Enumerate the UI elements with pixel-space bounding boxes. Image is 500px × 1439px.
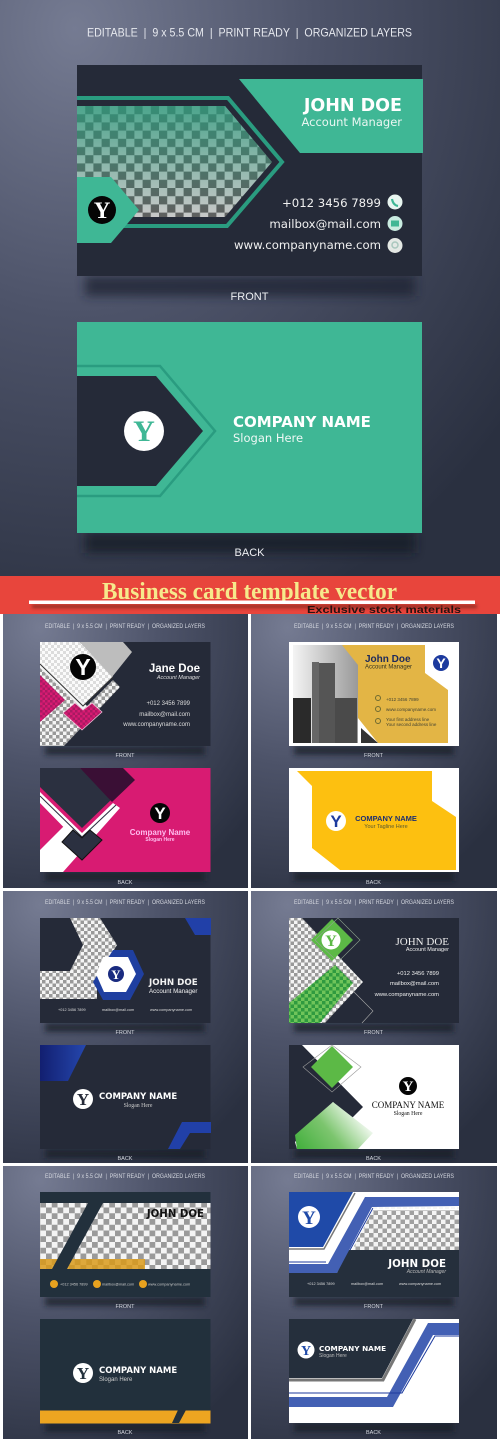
- icon: Y logo: [150, 803, 170, 823]
- name and contact: www.companyname.com: [150, 1008, 192, 1012]
- panel: green card set: BACK: [366, 1156, 381, 1162]
- company: COMPANY NAME: [355, 814, 417, 823]
- icon: Y logo: Y: [436, 655, 446, 671]
- company: [372, 1100, 445, 1117]
- panel: green card set: FRONT: [364, 1030, 384, 1036]
- icons: contact: [388, 194, 402, 253]
- panel: green card set: [251, 891, 497, 1163]
- panel: navy hexagon card set: BACK: [118, 1156, 133, 1162]
- name and contact: John Doe: [365, 654, 411, 665]
- name block: Account Manager: [302, 115, 402, 129]
- panel: orange card set: FRONT: [116, 1304, 135, 1310]
- name block: JOHN DOE: [303, 96, 402, 116]
- name and contact: www.companyname.com: [122, 722, 190, 728]
- contact details: www.companyname.com: [234, 238, 381, 252]
- company: Slogan Here: [145, 837, 175, 843]
- name and contact: [307, 1258, 446, 1286]
- name and contact: Account Manager: [156, 675, 201, 681]
- banner: title: [0, 576, 500, 616]
- company: Slogan Here: [124, 1103, 153, 1109]
- company: Slogan Here: [99, 1377, 133, 1383]
- company: Slogan Here: [319, 1353, 347, 1359]
- company: [99, 1366, 177, 1383]
- card: yellow front: [289, 642, 459, 746]
- name and contact: mailbox@mail.com: [351, 1282, 383, 1286]
- name and contact: JOHN DOE: [148, 978, 198, 988]
- icons: contact: [376, 696, 380, 724]
- contact row: www.companyname.com: [148, 1282, 190, 1286]
- panel: pink card set: BACK: [118, 880, 133, 886]
- icon: Y logo: [298, 1342, 314, 1359]
- panel: navy hexagon card set: FRONT: [116, 1030, 135, 1036]
- company name: [233, 413, 371, 445]
- panel: orange card set: [3, 1166, 248, 1439]
- name and contact: [365, 654, 437, 727]
- icon: Y logo: [433, 655, 449, 671]
- shadow: back card: [85, 533, 415, 553]
- name and contact: mailbox@mail.com: [139, 712, 190, 718]
- name and contact: www.companyname.com: [374, 992, 439, 998]
- icon: Y logo: Y: [75, 654, 91, 680]
- name and contact: +012 3456 7899: [146, 701, 191, 707]
- icon: Y logo: Y: [403, 1079, 414, 1095]
- company: [319, 1344, 386, 1359]
- panel: blue card set: FRONT: [364, 1304, 384, 1310]
- header: main spec line: EDITABLE | 9 x 5.5 CM | PRINT READY | ORGANIZED LAYERS: [87, 26, 412, 40]
- icon: Y logo: Y: [154, 804, 166, 823]
- company: COMPANY NAME: [319, 1344, 386, 1353]
- icon: Y logo: Y: [111, 967, 121, 982]
- icon: Y logo: Y: [302, 1208, 316, 1229]
- icon: Y logo: Y: [330, 812, 342, 831]
- subtitle text: Exclusive stock materials: [307, 604, 461, 616]
- card: Jane Doe front: [40, 642, 210, 746]
- company name: COMPANY NAME: [233, 413, 371, 431]
- icon: Y logo: [73, 1363, 93, 1383]
- icon: Y logo: [124, 411, 164, 451]
- name and contact: +012 3456 7899: [397, 971, 439, 977]
- name and contact: www.companyname.com: [386, 707, 436, 712]
- name and contact: +012 3456 7899: [58, 1008, 86, 1012]
- name and contact: +012 3456 7899: [307, 1282, 335, 1286]
- company: Your Tagline Here: [364, 824, 408, 830]
- name and contact: Account Manager: [365, 664, 412, 670]
- icon: Y logo: [326, 811, 346, 831]
- card: teal back: [77, 322, 422, 533]
- card: blue back: [289, 1319, 459, 1423]
- company: COMPANY NAME: [372, 1100, 445, 1110]
- card: hexagon back: [40, 1045, 211, 1149]
- contact row: [50, 1280, 190, 1288]
- name and contact: Account Manager: [406, 947, 449, 953]
- panel: pink card set: [3, 614, 248, 888]
- panel: yellow card set: BACK: [366, 880, 381, 886]
- header line: EDITABLE | 9 x 5.5 CM | PRINT READY | ORGANIZED LAYERS: [45, 900, 205, 906]
- icon: Y logo: [298, 1206, 320, 1229]
- contact details: +012 3456 7899: [282, 196, 381, 210]
- name and contact: mailbox@mail.com: [390, 981, 439, 987]
- icon: Y logo: [73, 1089, 93, 1109]
- company: COMPANY NAME: [99, 1092, 177, 1102]
- card: yellow back: [289, 768, 459, 872]
- contact details: mailbox@mail.com: [269, 217, 381, 231]
- name and contact: Jane Doe: [149, 663, 200, 675]
- company: [355, 814, 417, 830]
- name and contact: mailbox@mail.com: [102, 1008, 134, 1012]
- card: green front: [289, 918, 459, 1023]
- icon: Y logo: [70, 654, 96, 680]
- name and contact: Account Manager: [406, 1269, 446, 1275]
- name and contact: JOHN DOE: [387, 1258, 446, 1270]
- name and contact: [374, 936, 449, 998]
- name and contact: [122, 663, 201, 728]
- header line: EDITABLE | 9 x 5.5 CM | PRINT READY | ORGANIZED LAYERS: [294, 624, 454, 630]
- header line: EDITABLE | 9 x 5.5 CM | PRINT READY | ORGANIZED LAYERS: [45, 1174, 205, 1180]
- icon: Y logo: Y: [301, 1344, 311, 1359]
- icon: Y logo: [88, 196, 116, 224]
- name and contact: +012 3456 7899: [386, 697, 419, 702]
- name and contact: Account Manager: [149, 988, 198, 995]
- card: blue front: [289, 1192, 459, 1297]
- company: Slogan Here: [394, 1111, 423, 1117]
- name and contact: [58, 978, 198, 1012]
- card: green back: [289, 1045, 459, 1149]
- panel: yellow card set: FRONT: [364, 753, 384, 759]
- company: [99, 1092, 177, 1109]
- icon: Y logo: Y: [133, 415, 155, 448]
- contact details: [234, 196, 381, 252]
- header line: EDITABLE | 9 x 5.5 CM | PRINT READY | ORGANIZED LAYERS: [294, 1174, 454, 1180]
- label: back: BACK: [235, 547, 265, 559]
- name and contact: www.companyname.com: [399, 1282, 441, 1286]
- shadow: front card: [85, 276, 415, 296]
- title text: Business card template vector: [102, 579, 397, 605]
- name and contact: JOHN DOE: [396, 936, 449, 948]
- icon: Y logo: [322, 930, 340, 950]
- icon: Y logo: [399, 1077, 417, 1095]
- card: orange front: [40, 1192, 210, 1297]
- contact row: +012 3456 7899: [60, 1282, 88, 1286]
- panel: main teal business card: [0, 0, 500, 576]
- icon: Y logo: [108, 966, 124, 982]
- name: JOHN DOE: [146, 1209, 204, 1220]
- card: pink back: [40, 768, 210, 872]
- card: hexagon front: [40, 918, 211, 1023]
- panel: blue card set: BACK: [366, 1430, 381, 1436]
- header line: EDITABLE | 9 x 5.5 CM | PRINT READY | ORGANIZED LAYERS: [45, 624, 205, 630]
- contact row: mailbox@mail.com: [102, 1282, 134, 1286]
- header line: EDITABLE | 9 x 5.5 CM | PRINT READY | ORGANIZED LAYERS: [294, 900, 454, 906]
- panel: orange card set: BACK: [118, 1430, 133, 1436]
- card: orange back: [40, 1319, 210, 1424]
- icon: Y logo: Y: [77, 1364, 89, 1383]
- company name: Slogan Here: [233, 431, 303, 445]
- icon: Y logo: Y: [325, 933, 337, 950]
- name and contact: Your first address line: [386, 717, 430, 722]
- icon: Y logo: Y: [94, 198, 111, 223]
- card: teal front: [77, 65, 423, 276]
- icon: Y logo: Y: [77, 1090, 89, 1109]
- name and contact: Your second address line: [386, 722, 437, 727]
- panel: navy hexagon card set: [3, 891, 248, 1163]
- panel: blue card set: [251, 1166, 497, 1439]
- company: Company Name: [130, 828, 191, 837]
- name block: [302, 96, 402, 129]
- panel: pink card set: FRONT: [116, 753, 135, 759]
- panel: yellow card set: [251, 614, 497, 888]
- label: front: FRONT: [231, 291, 269, 303]
- company: [130, 828, 191, 843]
- company: COMPANY NAME: [99, 1366, 177, 1376]
